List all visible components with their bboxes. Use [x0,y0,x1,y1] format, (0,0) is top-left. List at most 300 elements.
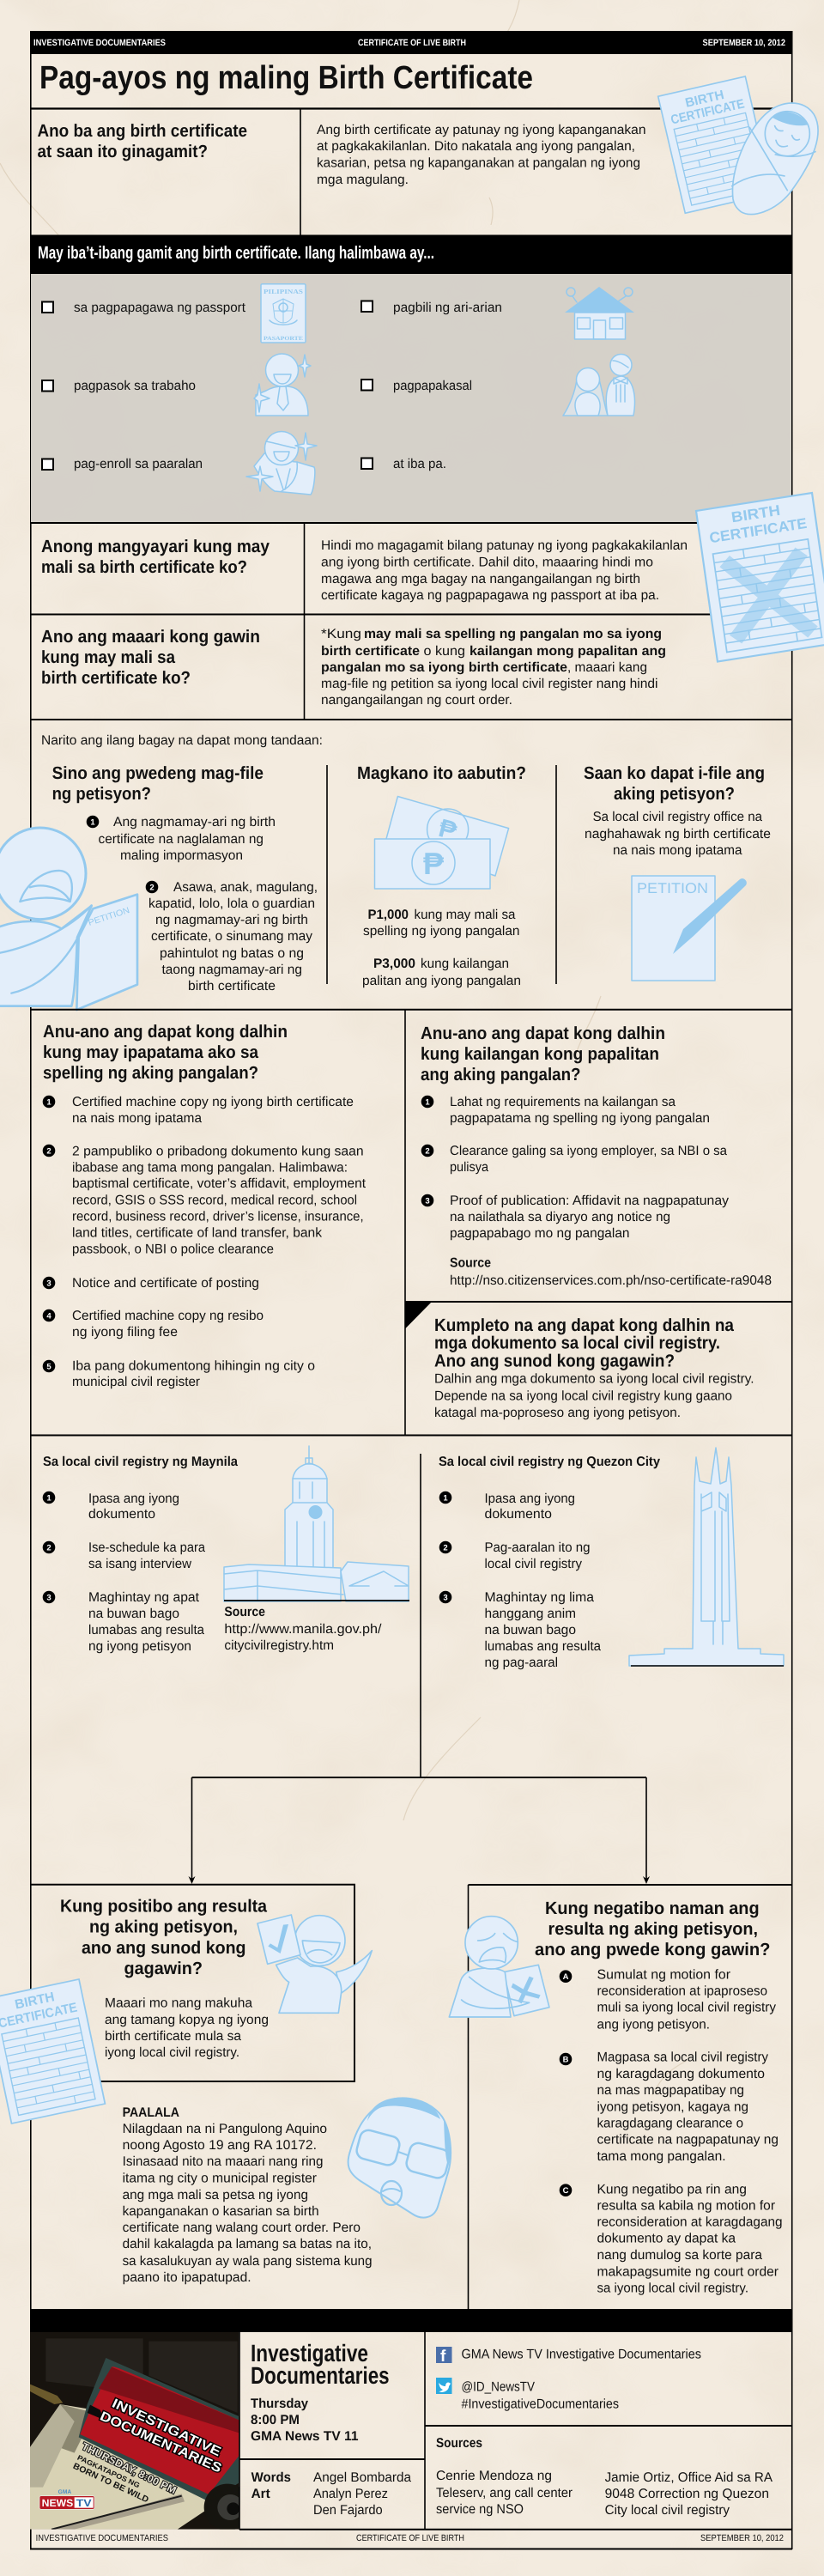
panel: documents for spelling correction [30,1010,792,1436]
heading: ano ang sunod kong [82,1938,245,1958]
icon: couple [563,354,634,416]
body text: Depende na sa iyong local civil registry kung gaano [434,1389,732,1404]
step 3: na buwan bago [484,1623,576,1637]
icon: twitter [436,2378,451,2394]
item C: C [563,2186,569,2196]
item 2: birth certificate [188,979,276,993]
step 3: na buwan bago [88,1607,179,1621]
body text: iyong local civil registry. [105,2045,239,2060]
answer text: certificate kagaya ng pagpapagawa ng passport at iba pa. [321,588,659,603]
footer [36,2533,784,2543]
item 1: 1 [425,1097,430,1108]
source [224,1605,382,1653]
item 2: kapatid, lolo, lola o guardian [148,896,315,911]
item 1 [87,815,276,863]
item 1: Certified machine copy ng iyong birth certificate [72,1095,354,1109]
icon: Quezon Memorial Circle [629,1448,784,1666]
panel: reminder note: ang mga mali sa petsa ng iyong [123,2188,308,2202]
panel: credits: Art [251,2487,270,2501]
column: where to file: Sa local civil registry office na [593,810,762,824]
heading: Ano ang sunod kong gagawin? [434,1352,675,1371]
column: who can file [52,763,318,993]
use: school: pag-enroll sa paaralan [74,457,203,471]
answer text: may mali sa spelling ng pangalan mo sa iyong [364,627,662,641]
item 2 [43,1144,367,1257]
item C: makapagsumite ng court order [597,2264,779,2279]
panel: Manila registry: Sa local civil registry ng Maynila [43,1455,238,1469]
item 2: Clearance galing sa iyong employer, sa NBI o sa [450,1144,727,1158]
certificate: CERTIFICATE [670,97,746,128]
certificate: BIRTH [684,88,725,111]
answer text: *Kung [321,627,361,641]
question heading: Ano ang maaari kong gawin [41,627,260,647]
icon: birth certificate [0,1979,105,2123]
item 5: 5 [46,1362,52,1372]
panel: reminder note [123,2105,373,2285]
item A: Sumulat ng motion for [597,1968,730,1983]
panel: credits: Words [251,2470,291,2485]
panel: reminder note: dahil kakalagda pa lamang sa batas na ito, [123,2237,372,2251]
step 1: dokumento [88,1507,155,1522]
question heading: mali sa birth certificate ko? [41,557,247,577]
panel: reminder note: itama ng city o municipal register [123,2172,317,2186]
answer text: birth certificate [321,644,420,659]
panel: sources: service ng NSO [436,2502,524,2517]
item B: B [563,2056,569,2064]
footer: SEPTEMBER 10, 2012 [700,2533,784,2543]
panel: show information: 8:00 PM [251,2413,300,2427]
item B: tama mong pangalan. [597,2149,726,2164]
item 1 [421,1095,710,1126]
icon: petition and pen: PETITION [637,880,708,896]
icon: passport: PILIPINAS [264,288,303,295]
icon: peso bills: ₱ [436,814,460,846]
photo: Investigative Documentaries promo: BORN TO BE WILD [71,2461,150,2505]
cost 1000: P1,000 [367,908,409,922]
cost 3000: kung kailangan [421,957,509,971]
panel: what happens if wrong [30,523,792,720]
step 1: 1 [46,1494,52,1503]
icon: petition and pen [632,876,747,981]
panel: social media: GMA News TV Investigative Documentaries [462,2348,701,2362]
item 5 [43,1359,315,1389]
panel: sources [239,2426,792,2530]
icon: job applicant [254,354,311,416]
answer text: o kung [424,644,465,659]
panel: show information: Investigative [251,2340,368,2366]
answer text [317,123,645,187]
item 1: pagpapatama ng spelling ng iyong pangalan [450,1111,710,1126]
source: http://www.manila.gov.ph/ [224,1622,382,1637]
item 4 [43,1309,264,1340]
panel: next steps [405,1302,792,1420]
answer text: , maaari kang [567,660,647,675]
panel: social media: @ID_NewsTV [462,2380,536,2395]
panel: reminder note: paano ito ipapatupad. [123,2270,251,2285]
item C: resulta sa kabila ng motion for [597,2199,775,2214]
item C: sa iyong local civil registry. [597,2281,748,2296]
header bar [30,31,792,54]
step 2: 2 [443,1544,448,1552]
photo: Investigative Documentaries promo: INVESTIGATIVE [110,2396,223,2459]
item 2 [421,1144,727,1175]
panel: three columns [52,763,771,993]
item B: karagdagang clearance o [597,2117,743,2131]
cost 1000 [363,908,520,939]
heading [43,1022,288,1083]
body text: Dalhin ang mga dokumento sa iyong local civil registry. [434,1372,754,1387]
item C: reconsideration at karagdagang [597,2215,783,2230]
panel: sources: 9048 Correction ng Quezon [605,2487,769,2501]
icon: passport: PASAPORTE [264,336,303,342]
heading [434,1315,735,1371]
panel: sources: Cenrie Mendoza ng [436,2469,552,2483]
item 1: 1 [46,1097,52,1108]
panel: show information [239,2332,425,2530]
answer text: nangangailangan ng court order. [321,693,512,708]
use: property: pagbili ng ari-arian [393,301,502,315]
heading: spelling ng aking pangalan? [43,1063,258,1083]
question heading: Ano ba ang birth certificate [38,121,247,141]
icon: person reading petition [0,828,137,1010]
black band [30,2309,792,2332]
item B: na mas magpapatibay ng [597,2083,744,2098]
item B: Magpasa sa local civil registry [597,2050,768,2065]
body text: Maaari mo nang makuha [105,1996,252,2011]
use: school [42,431,317,495]
panel: social media: #InvestigativeDocumentaries [462,2397,619,2412]
step 2: Pag-aaralan ito ng [484,1540,591,1555]
icon: sad person with rejected document [449,1917,549,2017]
item 2: 2 pampubliko o pribadong dokumento kung saan [72,1144,364,1158]
source [450,1256,772,1288]
step 3: 3 [46,1594,52,1602]
item C: dokumento ay dapat ka [597,2232,736,2246]
icon: happy person with approved document [258,1915,372,2013]
item 2: Asawa, anak, magulang, [173,880,318,895]
panel: negative result [449,1885,792,2310]
item 2: record, GSIS o SSS record, medical record, school [72,1194,357,1208]
panel: Quezon City registry [439,1448,784,1670]
heading: ano ang pwede kong gawin? [535,1940,771,1959]
heading [60,1897,268,1978]
item A: reconsideration at ipaproseso [597,1984,767,1999]
answer text: pangalan mo sa iyong birth certificate [321,660,567,675]
use: marriage: pagpapakasal [393,379,472,393]
photo: Investigative Documentaries promo: TV [76,2497,92,2509]
answer text: mga magulang. [317,173,409,187]
panel: reminder note: PAALALA [123,2105,179,2120]
answer text: mag-file ng petition sa iyong local civil register nang hindi [321,677,657,691]
step 2: local civil registry [484,1557,582,1571]
answer text [321,538,688,603]
panel: reminder note: Isinasaad nito na maaari nang ring [123,2154,323,2169]
item 4: Certified machine copy ng resibo [72,1309,264,1323]
header bar: INVESTIGATIVE DOCUMENTARIES [33,38,166,48]
question heading: at saan ito ginagamit? [38,142,208,161]
item 2: baptismal certificate, voter’s affidavit, employment [72,1176,367,1191]
item A: A [563,1972,569,1982]
question heading: kung may mali sa [41,647,176,667]
column: where to file [584,763,771,981]
photo: Investigative Documentaries promo [30,2332,251,2530]
item 5: Iba pang dokumentong hihingin ng city o [72,1359,315,1374]
icon: house with keys [565,287,634,339]
black band heading [30,235,792,274]
item 2: taong nagmamay-ari ng [161,963,302,977]
panel: positive result [30,1885,372,2081]
use: marriage [361,354,634,416]
panel: sources: Teleserv, ang call center [436,2486,573,2500]
answer text: at pagkakakilanlan. Dito nakatala ang iyong pangalan, [317,139,635,154]
step 3: Maghintay ng apat [88,1590,200,1605]
source: Source [224,1605,265,1619]
icon: facebook: f [440,2348,446,2366]
item A [560,1968,776,2032]
column: who can file: ng petisyon? [52,784,151,804]
panel: credits: Angel Bombarda [313,2470,411,2485]
icon: Manila city hall [224,1446,409,1601]
icon: facebook [436,2347,451,2366]
black band heading: May iba’t-ibang gamit ang birth certificate. Ilang halimbawa ay... [38,243,434,263]
item 2: record, business record, driver’s license, insurance, [72,1210,364,1224]
panel: reminder note: certificate nang walang court order. Pero [123,2221,360,2235]
item 2: 2 [425,1147,430,1156]
item B: certificate na nagpapatunay ng [597,2133,779,2148]
step 3: hanggang anim [484,1607,576,1621]
panel: sources: City local civil registry [605,2503,730,2518]
answer text: magawa ang mga bagay na nangangailangan ng birth [321,572,640,586]
use: passport: sa pagpapagawa ng passport [74,301,246,315]
panel: what can I do [41,627,666,708]
icon: President Aquino face [348,2098,451,2218]
heading: Kung negatibo naman ang [545,1899,760,1918]
use: others: at iba pa. [393,457,446,471]
step 2: Ise-schedule ka para [88,1540,205,1555]
question heading [41,537,270,577]
cost 1000: spelling ng iyong pangalan [363,924,520,939]
step 3: lumabas ang resulta [88,1623,204,1637]
header bar: CERTIFICATE OF LIVE BIRTH [358,38,466,48]
answer text: Hindi mo magagamit bilang patunay ng iyong pagkakakilanlan [321,538,688,553]
item 3: Notice and certificate of posting [72,1276,259,1291]
column: who can file: Sino ang pwedeng mag-file [52,763,264,783]
baby [732,103,818,215]
body text: birth certificate mula sa [105,2029,241,2044]
step 1 [43,1492,179,1522]
step 3: ng iyong petisyon [88,1639,191,1654]
column: where to file: naghahawak ng birth certificate [585,827,771,841]
column: where to file: na nais mong ipatama [613,843,742,858]
photo: Investigative Documentaries promo: PAGKATAPOS NG [76,2453,141,2489]
item C: nang dumulog sa korte para [597,2248,762,2263]
footer: CERTIFICATE OF LIVE BIRTH [356,2533,464,2543]
item B: iyong petisyon, kagaya ng [597,2100,748,2115]
item C [560,2183,783,2296]
heading: ang aking pangalan? [421,1065,580,1084]
item 2: ng nagmamay-ari ng birth [155,913,308,927]
answer text [321,627,666,708]
icon: student with documents [246,431,317,495]
panel: show information: GMA News TV 11 [251,2429,359,2444]
cost 3000 [362,957,521,988]
answer text: kasarian, petsa ng kapanganakan at pangalan ng iyong [317,156,640,170]
panel: Manila registry [43,1446,409,1654]
panel: credits: Den Fajardo [313,2503,383,2518]
heading: mga dokumento sa local civil registry. [434,1334,720,1353]
question heading: Anong mangyayari kung may [41,537,270,556]
photo: Investigative Documentaries promo: NEWS [42,2497,73,2509]
panel: show information: Documentaries [251,2362,390,2389]
column: where to file: Saan ko dapat i-file ang [584,763,765,783]
cost 3000: palitan ang iyong pangalan [362,974,521,988]
heading: Anu-ano ang dapat kong dalhin [421,1024,665,1043]
panel: reminder note: Nilagdaan na ni Pangulong Aquino [123,2122,327,2136]
item C: Kung negatibo pa rin ang [597,2183,747,2197]
source: citycivilregistry.htm [224,1638,334,1653]
panel: show information: Thursday [251,2397,308,2411]
item B: ng karagdagang dokumento [597,2067,765,2081]
item 3: 3 [46,1279,52,1288]
item 2: 2 [46,1147,52,1156]
photo: Investigative Documentaries promo: DOCUMENTARIES [98,2409,224,2476]
item 1: maling impormasyon [120,848,243,863]
use: job [42,354,311,416]
answer text: ang iyong birth certificate. Dahil dito, maaaring hindi mo [321,556,653,570]
step 1: Ipasa ang iyong [88,1492,179,1506]
item 1: 1 [90,817,95,828]
step 2: sa isang interview [88,1557,192,1571]
item 3 [421,1194,729,1241]
panel: reminder note: noong Agosto 19 ang RA 10172. [123,2138,317,2153]
footer: INVESTIGATIVE DOCUMENTARIES [36,2533,168,2543]
icon: invalid birth certificate: BIRTH [730,501,781,526]
panel: credits [239,2459,425,2518]
icon: peso bills: ₱ [423,846,445,881]
item 2: land titles, certificate of land transfer, bank [72,1226,322,1241]
step 1: dokumento [484,1507,552,1522]
step 2 [439,1540,591,1571]
step 3: ng pag-aaral [484,1656,558,1670]
heading: ng aking petisyon, [89,1917,238,1937]
panel: documents for name change [421,1024,772,1288]
heading: resulta ng aking petisyon, [548,1919,758,1939]
source: http://nso.citizenservices.com.ph/nso-certificate-ra9048 [450,1273,772,1288]
column: cost [357,763,526,988]
item 4: ng iyong filing fee [72,1325,178,1340]
certificate [658,76,772,213]
heading: Anu-ano ang dapat kong dalhin [43,1022,288,1042]
body text: ang tamang kopya ng iyong [105,2013,269,2027]
item 3: Proof of publication: Affidavit na nagpapatunay [450,1194,729,1208]
item 5: municipal civil register [72,1375,200,1389]
panel: sources: Sources [436,2436,482,2451]
answer text: kailangan mong papalitan ang [470,644,666,659]
item 1: Lahat ng requirements na kailangan sa [450,1095,676,1109]
use: property [361,287,634,339]
item 2: pulisya [450,1160,488,1175]
use: passport [42,284,306,343]
corner triangle [405,1302,432,1328]
item 2: ibabase ang tama mong pangalan. Halimbawa: [72,1160,348,1175]
step 1: Ipasa ang iyong [484,1492,575,1506]
icon: invalid birth certificate: CERTIFICATE [708,514,809,546]
panel: reminder note: sa kasalukuyan ay wala pang sistema kung [123,2254,373,2269]
heading: kung may ipapatama ako sa [43,1042,259,1062]
icon: birth certificate: BIRTH [14,1989,56,2012]
item 1 [43,1095,354,1126]
item 2: certificate, o sinumang may [151,929,312,944]
panel: credits: Analyn Perez [313,2487,388,2501]
question heading: birth certificate ko? [41,668,191,688]
column: where to file: aking petisyon? [614,784,735,804]
heading [421,1024,665,1084]
column: cost: Magkano ito aabutin? [357,763,526,783]
step 2: 2 [46,1544,52,1552]
item 4: 4 [46,1312,52,1321]
item 2: pahintulot ng batas o ng [160,946,304,961]
item 2 [146,880,318,993]
photo: Investigative Documentaries promo: THURSDAY, 8:00 PM [80,2440,179,2496]
item A: muli sa iyong local civil registry [597,2001,776,2015]
item 2: 2 [149,883,154,893]
use: job: pagpasok sa trabaho [74,379,196,393]
step 3: lumabas ang resulta [484,1639,601,1654]
icon: person reading petition: PETITION [87,905,130,927]
item A: ang iyong petisyon. [597,2018,710,2032]
cost 3000: P3,000 [373,957,415,971]
step 3 [439,1590,601,1670]
heading: Kumpleto na ang dapat kong dalhin na [434,1315,735,1335]
icon: passport [261,284,306,343]
heading: gagawin? [124,1959,203,1978]
item 3: na nailathala sa diyaryo ang notice ng [450,1210,670,1224]
cost 1000: kung may mali sa [414,908,516,922]
item 3: pagpapabago mo ng pangalan [450,1226,630,1241]
step 1 [439,1492,575,1522]
heading: kung kailangan kong papalitan [421,1044,659,1064]
question heading [38,121,247,161]
panel: what is a birth certificate [30,108,792,235]
arrow: flow to outcomes [189,1454,650,1884]
icon: peso bills [374,797,509,889]
step 3: Maghintay ng lima [484,1590,594,1605]
item 1: Ang nagmamay-ari ng birth [113,815,276,829]
panel: social media [436,2347,701,2412]
title: Pag-ayos ng maling Birth Certificate [39,60,533,96]
intro line: Narito ang ilang bagay na dapat mong tandaan: [41,733,323,748]
heading: Kung positibo ang resulta [60,1897,268,1917]
icon: invalid birth certificate [696,493,824,661]
panel: reminder note: kapanganakan o kasarian sa birth [123,2204,319,2219]
step 2 [43,1540,205,1571]
item B [560,2050,779,2164]
item 1: na nais mong ipatama [72,1111,202,1126]
body text: katagal ma-poproseso ang iyong petisyon. [434,1406,681,1420]
heading [535,1899,771,1959]
item 3: 3 [425,1197,430,1206]
source: Source [450,1256,491,1271]
step 1: 1 [443,1494,448,1503]
item 1: certificate na naglalaman ng [98,832,264,847]
answer text: Ang birth certificate ay patunay ng iyong kapanganakan [317,123,645,137]
question heading [41,627,260,688]
panel: sources: Jamie Ortiz, Office Aid sa RA [605,2470,773,2485]
photo: Investigative Documentaries promo: GMA [58,2488,71,2495]
body text [105,1996,269,2060]
use: others [361,457,446,471]
body text [434,1372,754,1420]
